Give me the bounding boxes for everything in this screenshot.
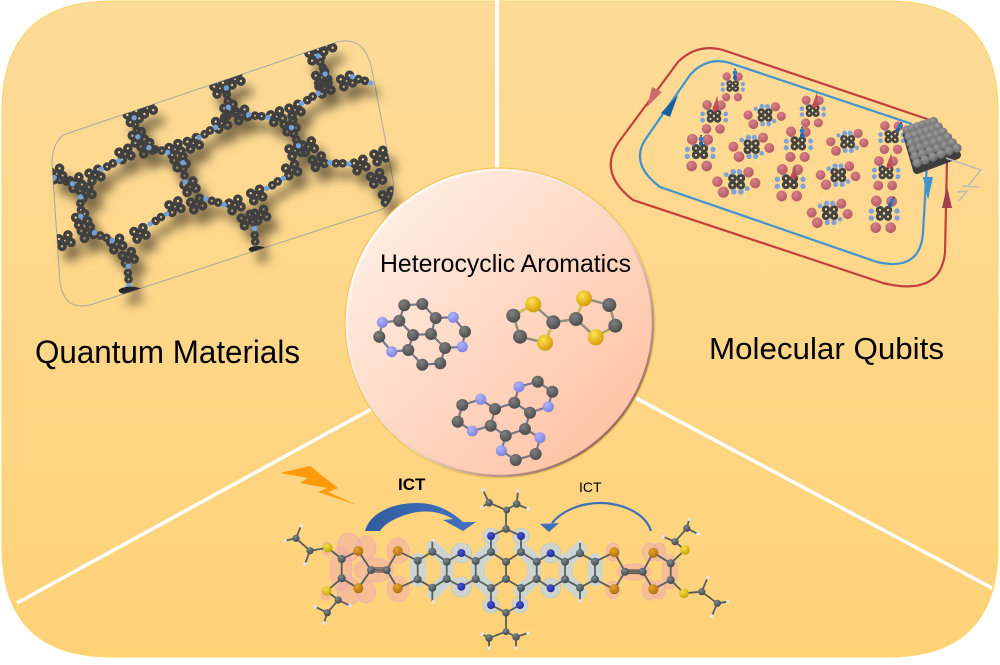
arrow: thin charge transfer	[540, 503, 651, 532]
molecule: donor-acceptor charge transfer	[283, 488, 730, 650]
panel: heterocyclic aromatics disc	[345, 168, 655, 478]
heading: heterocyclic aromatics: Heterocyclic Aromatics	[380, 250, 631, 278]
icon: lightning bolt	[280, 466, 357, 505]
disc	[345, 168, 655, 478]
current direction arrows	[647, 87, 952, 208]
heading: molecular qubits: Molecular Qubits	[709, 331, 944, 366]
molecule: tetrathiafulvalene	[506, 290, 622, 351]
panel: molecular qubits device	[611, 48, 981, 286]
qubit molecules	[680, 68, 909, 233]
molecule: tetraazapyrene	[373, 298, 471, 371]
framework lattice	[47, 36, 398, 295]
outer red current loop	[611, 48, 947, 286]
battery wire	[946, 158, 981, 201]
heading: quantum materials: Quantum Materials	[35, 334, 300, 370]
label: ICT bold: ICT	[398, 475, 426, 494]
inner blue current loop	[640, 61, 927, 264]
metal electrode	[902, 117, 962, 170]
donor orbitals	[321, 533, 678, 605]
framework outline	[52, 41, 393, 306]
panel: quantum materials framework	[47, 36, 398, 306]
arrow: bold charge transfer	[365, 503, 476, 531]
label: ICT regular: ICT	[579, 479, 602, 495]
acceptor orbitals	[418, 547, 595, 593]
molecular atoms	[283, 488, 730, 650]
disc rim	[347, 170, 653, 476]
molecular bonds	[285, 490, 728, 648]
molecule: hexaazatriphenylene	[452, 376, 558, 466]
